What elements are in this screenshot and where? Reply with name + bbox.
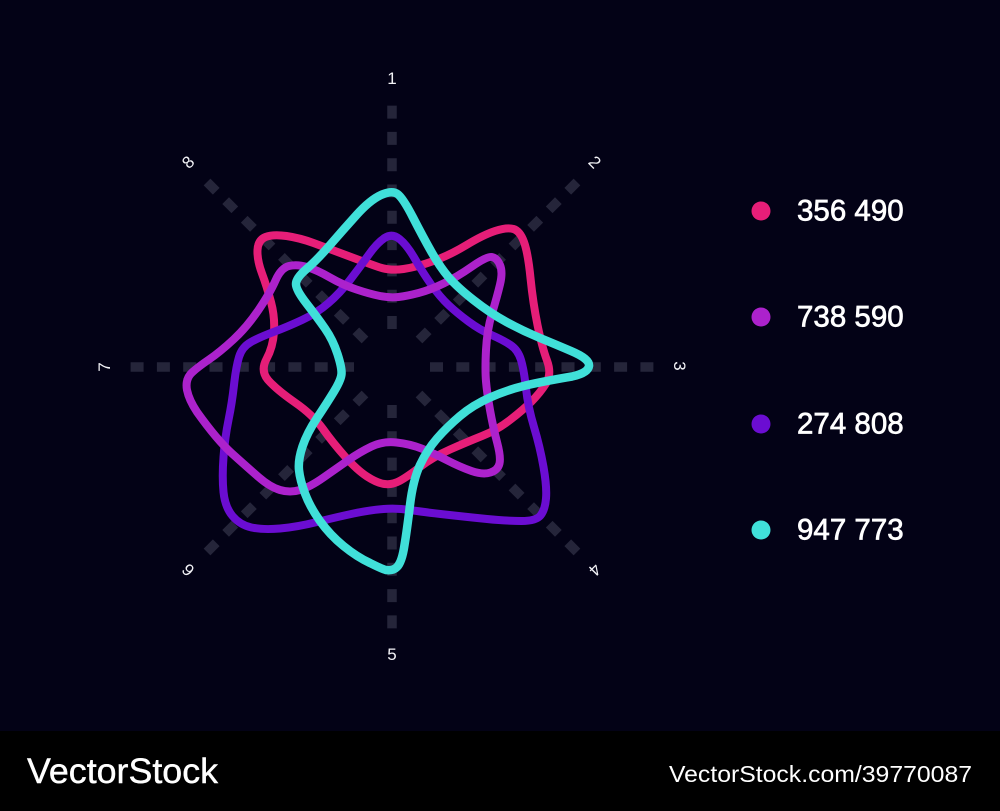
legend [752,194,904,546]
series: purple 738 590 [187,257,502,492]
axis labels [95,69,689,664]
radar axes [130,105,654,629]
legend item: 356 490: 356 490 [797,194,904,228]
axis labels: 2 [585,152,605,172]
footer url text: VectorStock.com/39770087 [669,761,972,787]
series: teal 947 773 [296,192,589,570]
footer bar [0,731,1000,811]
legend item: 274 808: 274 808 [797,408,904,440]
axis labels: 5 [387,645,397,664]
axis labels: 6 [178,560,198,580]
axis labels: 3 [670,361,689,371]
series: pink 356 490 [257,228,549,484]
footer logo text: VectorStock [27,752,219,791]
axis labels: 4 [585,560,605,580]
legend item: 947 773: 947 773 [797,514,904,546]
legend item: 738 590: 738 590 [797,300,904,334]
series: violet 274 808 [223,236,546,529]
axis labels: 1 [387,69,397,88]
axis labels: 7 [95,362,114,372]
radar series [187,192,589,570]
axis labels: 8 [178,152,198,172]
